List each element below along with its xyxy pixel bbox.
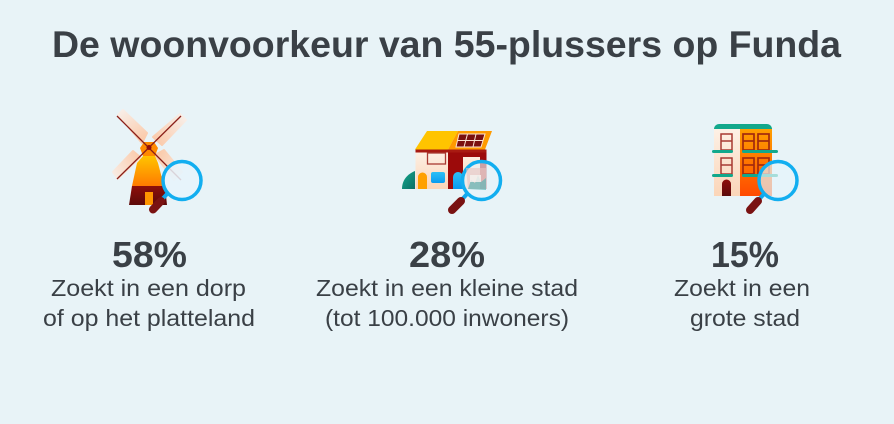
right wall [740, 128, 772, 196]
roof [714, 124, 772, 129]
orange door [418, 172, 427, 189]
percentage: 15% [711, 234, 779, 275]
title: De woonvoorkeur van 55-plussers op Funda [52, 24, 841, 65]
windmill door [145, 192, 153, 205]
balconies [712, 150, 778, 177]
description: (tot 100.000 inwoners) [325, 305, 569, 331]
windmill blades [113, 110, 186, 180]
solar panel [456, 134, 485, 147]
icon: house with magnifier [402, 131, 500, 210]
green bush [402, 171, 415, 189]
dark red section [448, 151, 486, 189]
description [43, 275, 255, 331]
description: of op het platteland [43, 305, 255, 331]
icon: windmill with magnifier [113, 110, 201, 210]
windmill cap [140, 142, 158, 156]
description [674, 275, 810, 331]
right windows [743, 134, 769, 174]
magnifier [153, 162, 201, 210]
description: Zoekt in een [674, 275, 810, 301]
magnifier [452, 162, 500, 210]
door [722, 180, 731, 196]
magnifier [750, 162, 797, 210]
roof edge [416, 150, 486, 152]
windmill sails [117, 116, 181, 180]
description: Zoekt in een dorp [51, 275, 246, 301]
percentage: 58% [112, 234, 187, 275]
panel: village or countryside [43, 110, 255, 331]
description [316, 275, 578, 331]
house walls [416, 151, 486, 189]
windmill base [129, 186, 167, 205]
windmill hub [146, 145, 152, 150]
description: grote stad [690, 305, 800, 331]
roof right [448, 131, 492, 150]
left wall [714, 128, 740, 196]
upper window [428, 153, 446, 164]
panel: small city [316, 131, 578, 331]
roof left [415, 131, 458, 150]
blue door [453, 172, 463, 189]
percentage: 28% [409, 234, 485, 275]
blue window [431, 172, 445, 183]
icon: apartment building with magnifier [712, 124, 797, 210]
panel: big city [674, 124, 810, 331]
windmill tower [132, 156, 164, 186]
left windows [721, 134, 732, 174]
description: Zoekt in een kleine stad [316, 275, 578, 301]
